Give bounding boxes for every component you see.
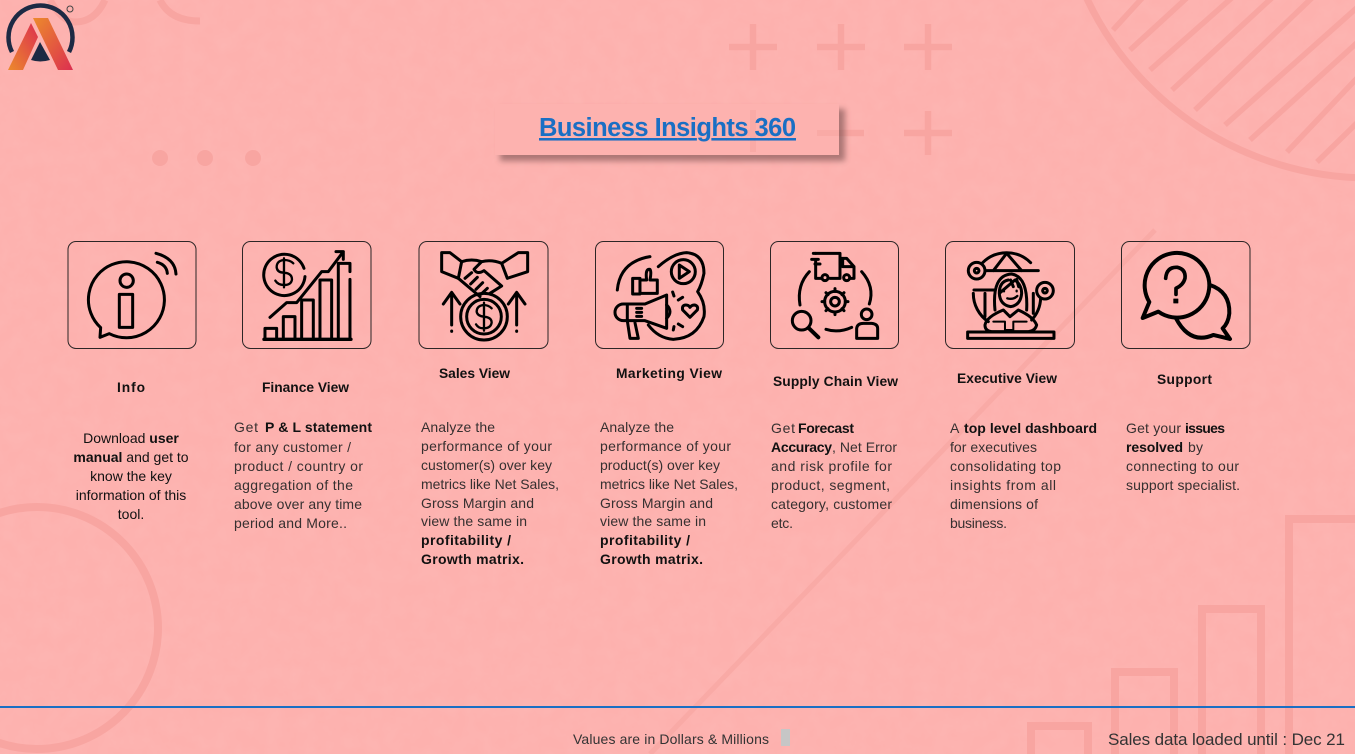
info description: tool.	[118, 506, 144, 522]
executive description: insights from all	[950, 477, 1056, 493]
finance description: period and More..	[234, 515, 347, 531]
finance description: product / country or	[234, 458, 363, 474]
footer: values note: Values are in Dollars & Millions	[573, 731, 769, 747]
icon: info speech bubble	[88, 253, 176, 338]
finance description: Get	[234, 419, 258, 435]
support description: Get your	[1126, 420, 1181, 436]
info description: information of this	[76, 487, 186, 503]
heading: finance view: Finance View	[262, 380, 349, 395]
executive description: business.	[950, 515, 1007, 531]
panel: support	[1122, 242, 1250, 493]
marketing description: profitability /	[600, 532, 690, 548]
supply chain description	[771, 420, 897, 531]
marketing description	[600, 419, 738, 567]
title: Business Insights 360	[539, 114, 796, 142]
marketing description: Analyze the	[600, 419, 674, 435]
marketing description: metrics like Net Sales,	[600, 476, 738, 492]
panel: executive view	[946, 242, 1097, 531]
supply chain description: Forecast	[798, 420, 854, 436]
heading: supply chain view: Supply Chain View	[773, 374, 898, 389]
finance description: for any customer /	[234, 439, 351, 455]
sales description: Growth matrix.	[421, 551, 524, 567]
icon: question bubbles	[1143, 253, 1230, 339]
info description: know the key	[90, 468, 172, 484]
panel: finance view	[234, 242, 372, 531]
marketing description: product(s) over key	[600, 457, 720, 473]
support description: by	[1188, 439, 1203, 455]
icon: executive globe	[968, 253, 1054, 338]
marketing description: performance of your	[600, 438, 731, 454]
supply chain description: Get	[771, 420, 795, 436]
executive description: dimensions of	[950, 496, 1038, 512]
supply chain description: product, segment,	[771, 477, 890, 493]
sales description: Analyze the	[421, 419, 495, 435]
sales description: view the same in	[421, 513, 527, 529]
heading: sales view: Sales View	[439, 366, 510, 381]
executive description: consolidating top	[950, 458, 1061, 474]
finance description: P & L statement	[265, 419, 372, 435]
icon: megaphone	[615, 253, 704, 339]
info description: manual and get to	[73, 449, 189, 465]
footer: sales data loaded: Sales data loaded until : Dec 21	[1108, 730, 1345, 749]
heading: marketing view: Marketing View	[616, 366, 722, 381]
sales description: metrics like Net Sales,	[421, 476, 559, 492]
supply chain description: etc.	[771, 515, 793, 531]
title box	[495, 104, 845, 161]
support description	[1126, 420, 1240, 493]
sales description: Gross Margin and	[421, 495, 534, 511]
support description: connecting to our	[1126, 458, 1239, 474]
footer: grey marker	[781, 729, 790, 746]
finance description: aggregation of the	[234, 477, 353, 493]
executive description: top level dashboard	[964, 420, 1097, 436]
footer line	[0, 706, 1355, 708]
sales description: customer(s) over key	[421, 457, 552, 473]
heading: executive view: Executive View	[957, 371, 1057, 386]
supply chain description: and risk profile for	[771, 458, 892, 474]
info description	[73, 430, 189, 522]
marketing description: Gross Margin and	[600, 495, 713, 511]
supply chain description: Accuracy	[771, 439, 832, 455]
sales description: profitability /	[421, 532, 511, 548]
sales description: performance of your	[421, 438, 552, 454]
support description: resolved	[1126, 439, 1183, 455]
sales description	[421, 419, 559, 567]
info description: Download user	[83, 430, 179, 446]
panel: marketing view	[596, 242, 738, 567]
heading: support: Support	[1157, 372, 1212, 387]
panel: supply chain view	[770, 242, 898, 531]
logo	[8, 5, 73, 70]
marketing description: view the same in	[600, 513, 706, 529]
finance description	[234, 419, 372, 531]
supply chain description: , Net Error	[832, 439, 897, 455]
heading: info: Info	[117, 380, 145, 395]
supply chain description: category, customer	[771, 496, 892, 512]
support description: support specialist.	[1126, 477, 1240, 493]
support description: issues	[1185, 420, 1225, 436]
icon: supply chain cycle	[792, 253, 878, 338]
icon: finance chart	[264, 252, 351, 339]
executive description	[950, 420, 1097, 531]
panel: sales view	[419, 242, 559, 567]
executive description: for executives	[950, 439, 1037, 455]
finance description: above over any time	[234, 496, 362, 512]
executive description: A	[950, 420, 960, 436]
icon: handshake and coin	[442, 253, 528, 340]
panel: info	[68, 242, 196, 522]
marketing description: Growth matrix.	[600, 551, 703, 567]
